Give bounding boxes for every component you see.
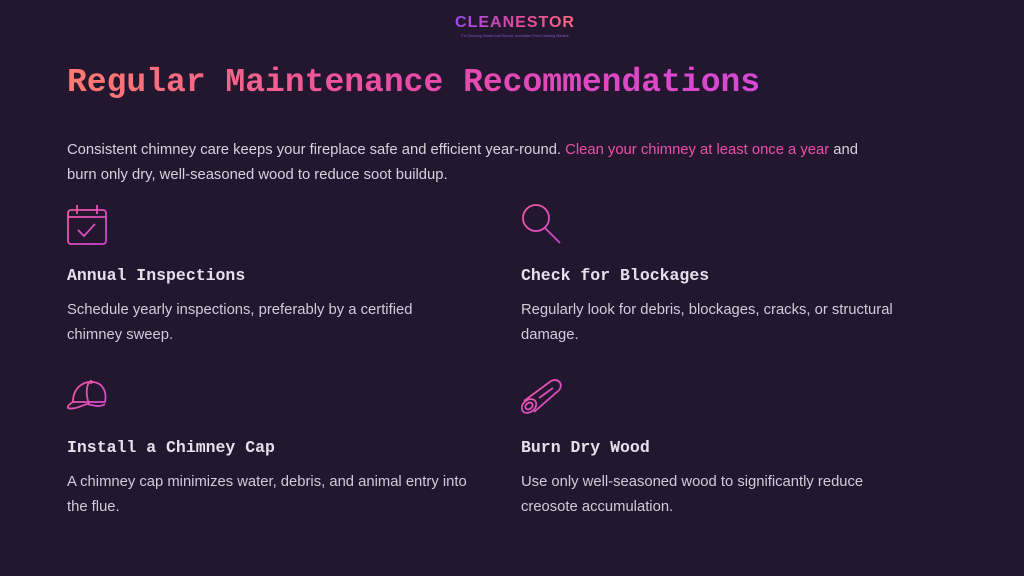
- icon: cap: [67, 380, 106, 410]
- item: annual inspections: [67, 205, 412, 343]
- body: Regularly look for debris, blockages, cracks, or structural damage.: [521, 302, 893, 343]
- logo: Pro Cleaning Guides And Service Journalism From Cleaning Masters: [461, 34, 569, 38]
- icon: log: [521, 379, 562, 414]
- body: Schedule yearly inspections, preferably by a certified chimney sweep.: [67, 302, 412, 343]
- body: Use only well-seasoned wood to significantly reduce creosote accumulation.: [521, 474, 863, 515]
- item: check for blockages: [521, 204, 893, 343]
- intro text: Consistent chimney care keeps your fireplace safe and efficient year-round. Clean your chimney at least once a year and: [67, 142, 858, 158]
- heading: Check for Blockages: [521, 266, 709, 285]
- body: A chimney cap minimizes water, debris, and animal entry into the flue.: [67, 474, 467, 515]
- heading: Burn Dry Wood: [521, 438, 650, 457]
- logo: CLEANESTOR: [455, 14, 575, 31]
- item: chimney cap: [67, 380, 467, 515]
- title: Regular Maintenance Recommendations: [67, 64, 760, 101]
- intro text: [67, 142, 858, 183]
- icon: magnifier: [522, 204, 561, 244]
- icon: calendar: [67, 205, 107, 245]
- heading: Annual Inspections: [67, 266, 245, 285]
- item: burn dry wood: [521, 379, 863, 515]
- heading: Install a Chimney Cap: [67, 438, 275, 457]
- intro text: burn only dry, well-seasoned wood to reduce soot buildup.: [67, 167, 448, 183]
